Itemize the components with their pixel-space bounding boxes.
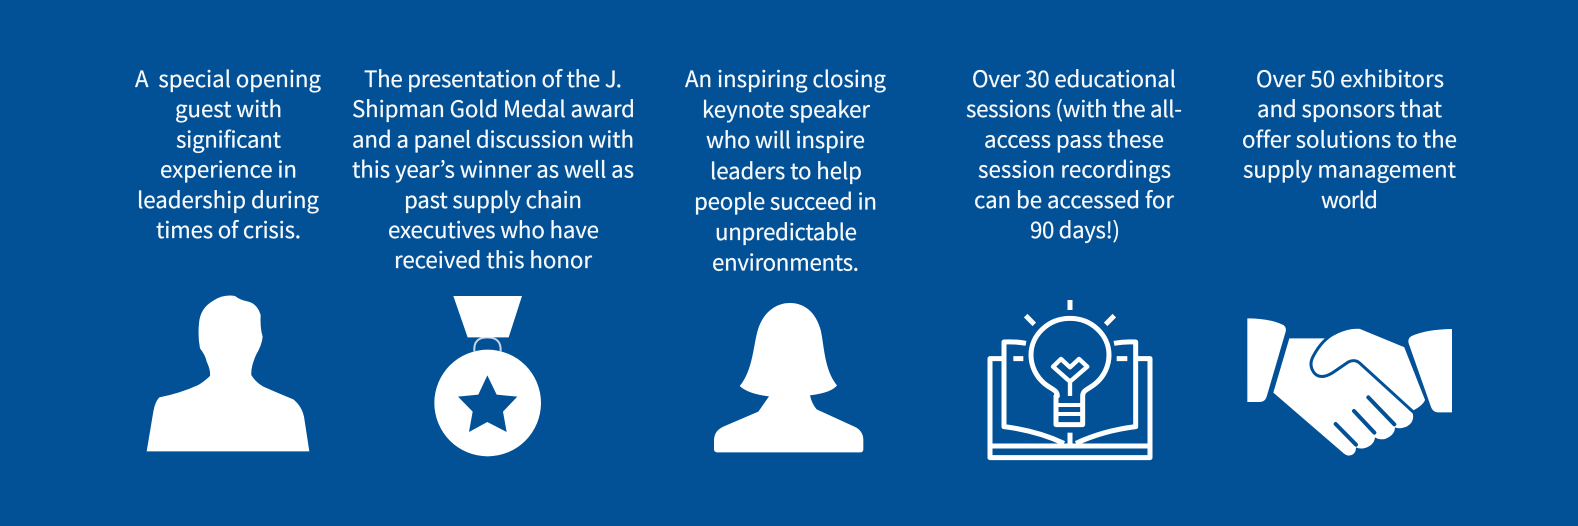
text: closing keynote description: environments.	[712, 246, 859, 278]
icon: open book with light bulb	[990, 300, 1150, 458]
text: gold medal description: The presentation of the J.	[364, 62, 622, 94]
text: gold medal description: executives who have	[388, 213, 599, 245]
icon: handshake	[1247, 318, 1452, 456]
text: gold medal description	[352, 62, 635, 275]
text: educational sessions description: 90 days!)	[1030, 213, 1120, 245]
text: educational sessions description: can be accessed for	[974, 183, 1174, 215]
text: closing keynote description: unpredictable	[715, 215, 857, 247]
text: closing keynote description: leaders to help	[710, 154, 862, 186]
text: gold medal description: this year’s winner as well as	[352, 153, 634, 185]
text: educational sessions description: session recordings	[978, 153, 1171, 185]
text: opening guest description: experience in	[160, 153, 297, 185]
text: closing keynote description: keynote speaker	[702, 93, 870, 125]
text: opening guest description: leadership during	[137, 183, 319, 215]
text: closing keynote description	[685, 62, 886, 278]
text: opening guest description: significant	[176, 122, 282, 154]
text: exhibitors description	[1242, 62, 1457, 215]
text: opening guest description: A special opening	[135, 62, 321, 94]
text: opening guest description	[135, 62, 321, 245]
text: closing keynote description: An inspiring closing	[685, 62, 886, 94]
text: gold medal description: past supply chain	[404, 183, 582, 215]
panel: closing keynote speaker	[685, 62, 886, 452]
panel: educational sessions	[966, 62, 1182, 458]
text: educational sessions description	[966, 62, 1182, 245]
text: exhibitors description: Over 50 exhibitors	[1256, 62, 1444, 94]
icon: woman silhouette	[714, 303, 863, 452]
text: closing keynote description: who will inspire	[706, 123, 865, 155]
text: exhibitors description: and sponsors that	[1257, 92, 1443, 124]
text: gold medal description: received this honor	[394, 243, 592, 275]
panel: exhibitors and sponsors	[1242, 62, 1457, 456]
text: educational sessions description: access pass these	[984, 122, 1164, 154]
icon: medal with star	[434, 296, 541, 456]
text: educational sessions description: sessions (with the all-	[966, 92, 1182, 124]
panel: gold medal award	[352, 62, 635, 456]
panel: opening guest	[135, 62, 321, 451]
text: exhibitors description: supply management	[1243, 153, 1457, 185]
text: gold medal description: and a panel discussion with	[352, 122, 634, 154]
text: gold medal description: Shipman Gold Medal award	[352, 92, 635, 124]
text: exhibitors description: world	[1321, 183, 1378, 215]
text: opening guest description: guest with	[175, 92, 282, 124]
text: closing keynote description: people succeed in	[694, 184, 877, 216]
text: exhibitors description: offer solutions to the	[1242, 122, 1457, 154]
text: educational sessions description: Over 30 educational	[972, 62, 1176, 94]
text: opening guest description: times of crisis.	[156, 213, 301, 245]
icon: man silhouette	[147, 296, 309, 451]
